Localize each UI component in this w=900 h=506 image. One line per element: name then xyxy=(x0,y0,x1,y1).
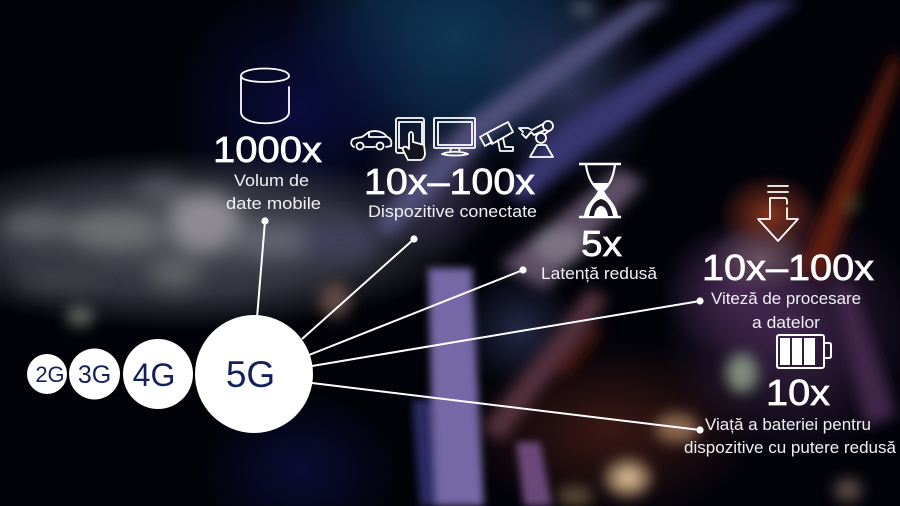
circle: 4G: 4G xyxy=(133,357,175,393)
line: devices xyxy=(302,235,418,339)
icon: tablet with hand xyxy=(396,118,425,160)
label: processing speed: Viteză de procesare xyxy=(711,289,861,308)
label: connected devices: Dispozitive conectate xyxy=(368,202,537,221)
purple bar xyxy=(516,442,552,506)
circle: 2G xyxy=(27,354,67,394)
connector lines xyxy=(257,217,704,434)
value: 5x: 5x xyxy=(581,223,622,264)
stat: processing speed xyxy=(702,186,874,332)
generation circles xyxy=(27,315,313,433)
icon: cctv camera xyxy=(480,122,513,151)
label: processing speed: a datelor xyxy=(752,313,820,332)
icon: hourglass xyxy=(579,164,621,217)
icon: down arrow xyxy=(758,186,798,241)
line: latency xyxy=(309,266,527,355)
circle: 3G: 3G xyxy=(78,361,111,389)
lavender column xyxy=(428,268,484,506)
line: battery xyxy=(312,383,704,434)
line: speed xyxy=(312,297,704,366)
value: 10x: 10x xyxy=(766,372,830,413)
label: latency: Latență redusă xyxy=(541,264,658,283)
circle: 5G: 5G xyxy=(226,354,275,395)
circle: 5G xyxy=(195,315,313,433)
icon: monitor xyxy=(434,118,475,156)
value: 10x-100x speed: 10x–100x xyxy=(702,247,874,288)
label: data volume: Volum de xyxy=(234,171,309,190)
label: battery life: dispozitive cu putere redusă xyxy=(684,438,897,457)
circle: 3G xyxy=(69,348,120,400)
stat: latency xyxy=(541,164,658,283)
circle: 2G: 2G xyxy=(35,362,65,387)
circle: 4G xyxy=(123,339,193,409)
icon: battery xyxy=(777,335,831,368)
label: data volume: date mobile xyxy=(226,194,321,213)
stat: connected devices xyxy=(351,118,553,221)
line: data volume xyxy=(257,217,269,318)
icon: cylinder xyxy=(241,68,289,123)
label: battery life: Viață a bateriei pentru xyxy=(705,415,871,434)
stat: data volume xyxy=(213,68,322,213)
red streaks xyxy=(798,52,900,280)
icon: robot arm xyxy=(519,121,553,157)
stat: battery life xyxy=(684,335,897,457)
diagonal light bands xyxy=(372,0,672,238)
cloud blobs xyxy=(2,211,74,241)
value: 10x-100x devices: 10x–100x xyxy=(364,161,535,202)
icons: devices xyxy=(351,118,553,160)
value: 1000x: 1000x xyxy=(213,129,322,170)
lower glows xyxy=(726,353,758,393)
icon: car xyxy=(351,131,391,150)
